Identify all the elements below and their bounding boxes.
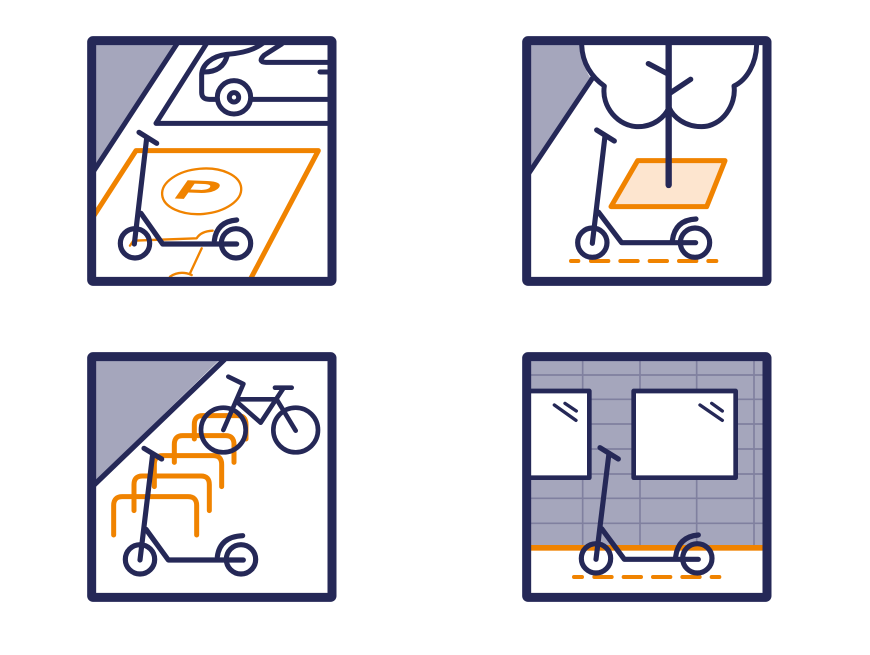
window reflections	[554, 403, 722, 420]
panel: bike racks	[92, 357, 332, 597]
tree scene	[528, 43, 757, 261]
frame	[527, 41, 767, 281]
faded bike rack outline	[130, 231, 213, 277]
frame	[92, 41, 332, 281]
icon: bicycle	[201, 377, 318, 452]
icon: scooter	[120, 132, 251, 258]
road edge	[528, 78, 592, 174]
panel: along building wall	[525, 357, 767, 597]
orange tree base zone	[611, 161, 725, 207]
parking area scene	[93, 43, 330, 280]
letter P: P	[167, 174, 229, 206]
pavement	[531, 546, 763, 593]
brick grid	[531, 361, 763, 545]
parking symbol	[160, 165, 243, 217]
orange bike racks	[114, 416, 246, 535]
bike rack scene	[93, 360, 318, 535]
orange parking bay	[93, 151, 318, 280]
orange wall line	[531, 545, 763, 551]
road edge	[93, 43, 177, 172]
panel: designated parking zone	[92, 41, 332, 281]
icon: scooter	[581, 448, 712, 573]
panel: park clear of tree	[527, 41, 767, 281]
icon: scooter	[125, 448, 256, 574]
road edge	[93, 360, 224, 486]
building wall scene	[525, 361, 763, 593]
window left	[525, 391, 589, 478]
orange dashed line	[572, 575, 722, 579]
orange dashed line	[569, 259, 718, 263]
pavement wedge	[96, 361, 218, 480]
pavement wedge	[96, 45, 175, 163]
icon: parked car	[202, 43, 330, 114]
frame	[527, 357, 767, 597]
brick wall background	[531, 361, 763, 546]
icon: tree	[582, 43, 757, 185]
car parking bay	[156, 43, 330, 123]
parking ellipse	[160, 165, 243, 217]
frame	[92, 357, 332, 597]
window right	[634, 391, 736, 478]
icon: scooter	[578, 130, 710, 257]
pavement wedge	[531, 45, 590, 167]
